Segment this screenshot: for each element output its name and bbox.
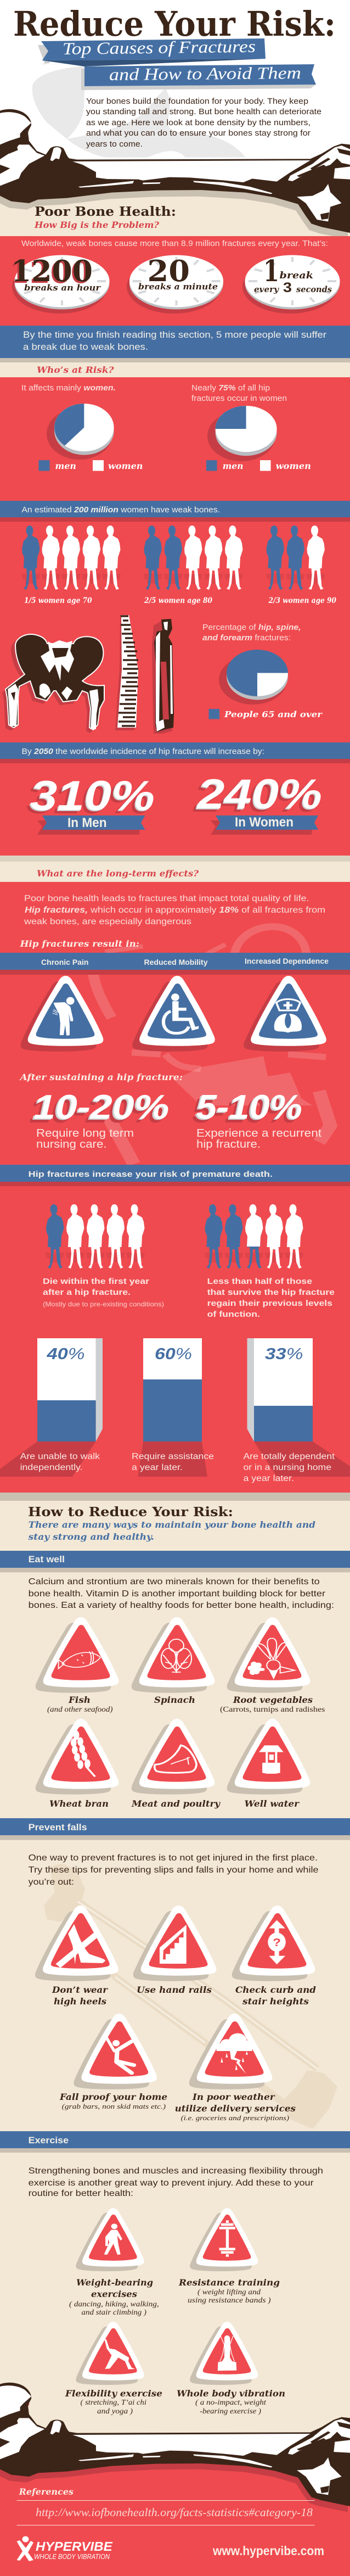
stat: 5-10 percent	[192, 1088, 321, 1150]
heading: how to reduce your risk: There are many ways to maintain your bone health and	[29, 1519, 315, 1530]
references: http://www.iofbonehealth.org/facts-statistics#category-18	[36, 2506, 313, 2519]
label: resistance training: ( weight lifting and	[197, 2288, 261, 2296]
label: weight-bearing	[69, 2277, 159, 2316]
people group: less than half regain function: regain their previous levels	[207, 1299, 332, 1308]
icon: hand rails	[133, 1906, 216, 1981]
text: 75 percent hip fractures	[191, 384, 287, 403]
stat: 240 percent in women	[193, 771, 322, 835]
label: fish: (and other seafood)	[47, 1705, 113, 1713]
panel: long-term effects red	[0, 882, 350, 1493]
label: fall proof	[59, 2092, 167, 2110]
legend: pie two: men	[223, 461, 244, 471]
bottom femur illustration	[0, 2383, 350, 2512]
text: poor bone health leads: Poor bone health leads to fractures that impact total quality of life.	[24, 894, 309, 903]
stat: 10-20 percent: nursing care.	[36, 1138, 106, 1150]
label: whole body vibration: -bearing exercise )	[200, 2407, 262, 2415]
legend: pie one: women	[108, 461, 143, 471]
stat: 10-20 percent: 10-20%	[29, 1092, 165, 1130]
text: percentage of fractures: Percentage of hip, spine,	[202, 623, 301, 632]
stat: 10-20 percent: 10-20%	[32, 1089, 168, 1127]
text: calcium and strontium	[29, 1577, 334, 1610]
blue band: eat well	[0, 1551, 350, 1572]
label: poor weather	[175, 2092, 296, 2122]
intro text	[86, 97, 321, 149]
heading: how to reduce your risk: How to Reduce Your Risk:	[28, 1505, 233, 1519]
bar: 40 percent unable to walk: 40%	[46, 1345, 84, 1363]
panel: how big red	[0, 236, 350, 326]
label: fall proof: Fall proof your home	[59, 2092, 167, 2102]
text: poor bone health leads: Hip fractures, which occur in approximately 18% of all fractures from	[25, 906, 325, 915]
label: root vegetables: (Carrots, turnips and radishes	[220, 1705, 325, 1713]
clock: 1 break every 3 seconds: every	[254, 284, 279, 294]
people group: die within first year: (Mostly due to pre-existing conditions)	[43, 1300, 164, 1308]
stat: 310 percent in men: 310%	[26, 776, 151, 823]
label: flexibility exercise: and yoga )	[97, 2407, 133, 2415]
blue band: result labels: Increased Dependence	[245, 957, 329, 965]
bar: 60 percent require assistance: 60%	[155, 1345, 192, 1363]
blue band: result labels	[0, 953, 350, 975]
blue band: result labels: Reduced Mobility	[144, 958, 208, 966]
pie chart: people 65 and over	[219, 650, 288, 705]
heading: how to reduce your risk	[28, 1505, 315, 1542]
heading: poor bone health: Poor Bone Health:	[35, 204, 176, 219]
people group: 2 of 5 age 80	[144, 526, 243, 605]
label: poor weather: (i.e. groceries and prescriptions)	[181, 2114, 289, 2122]
label: no high heels: high heels	[54, 1996, 106, 2007]
text: 75 percent hip fractures: Nearly 75% of all hip	[191, 384, 270, 393]
stat: 310 percent in men: 310%	[30, 773, 155, 819]
stat: 240 percent in women: 240%	[193, 774, 318, 821]
illustration: pelvis	[2, 634, 104, 733]
bar: 60 percent require assistance: a year later.	[132, 1463, 183, 1472]
stat: 5-10 percent: 5-10%	[195, 1089, 301, 1127]
label: curb heights	[235, 1985, 316, 2007]
clock: 20 breaks a minute: breaks a minute	[138, 282, 218, 292]
label: root vegetables	[220, 1695, 325, 1713]
panel: who's at risk red	[0, 377, 350, 856]
logo: hypervibe	[16, 2536, 112, 2561]
panel: how big red: Worldwide, weak bones cause more than 8.9 million fractures every year. That’s:	[21, 239, 328, 248]
text: strengthening bones	[29, 2166, 323, 2198]
people group: less than half regain function: that survive the hip fracture	[207, 1288, 335, 1297]
blue band: by the time: By the time you finish reading this section, 5 more people will suffer	[23, 329, 326, 340]
label: whole body vibration: ( a no-impact, weight	[195, 2398, 267, 2406]
icon: meat and poultry	[132, 1719, 214, 1795]
bar: 33 percent totally dependent: or in a nursing home	[244, 1463, 331, 1472]
logo: hypervibe: HYPERVIBE	[36, 2539, 112, 2553]
watermark: hip joint on red	[93, 926, 330, 1164]
blue band: by the time: a break due to weak bones.	[23, 342, 148, 352]
label: well water: Well water	[245, 1798, 300, 1809]
illustration: forearm bones	[152, 619, 174, 734]
blue band: by the time	[0, 326, 350, 362]
stat: 310 percent in men: 310%	[29, 774, 154, 820]
label: whole body vibration: Whole body vibration	[177, 2388, 285, 2399]
label: curb heights: Check curb and	[235, 1985, 316, 1995]
blue band: premature death	[0, 1165, 350, 1186]
bar: 40 percent unable to walk: Are unable to walk	[20, 1452, 100, 1461]
watermark: pelvis in header	[32, 66, 246, 158]
people group: less than half regain function: of function.	[207, 1310, 260, 1319]
people group: die within first year	[43, 1204, 164, 1308]
intro text: you standing tall and strong. But bone health can deteriorate	[86, 108, 321, 116]
label: poor weather: utilize delivery services	[175, 2103, 296, 2114]
heading: how to reduce your risk: stay strong and healthy.	[29, 1532, 154, 1542]
blue band: prevent falls	[0, 1818, 350, 1840]
label: flexibility exercise	[65, 2388, 162, 2415]
people group: less than half regain function: Less than half of those	[207, 1277, 312, 1286]
bar: 40 percent unable to walk	[0, 1338, 103, 1477]
clock: 1200 breaks an hour: 1200	[9, 256, 91, 290]
text: one way to prevent: One way to prevent fractures is to not get injured in the first place.	[29, 1853, 318, 1863]
text: strengthening bones: exercise is another great way to prevent injury. Add these to your	[29, 2178, 314, 2188]
intro text: years to come.	[86, 140, 143, 149]
text: calcium and strontium: bones. Eat a variety of healthy foods for better bone health, including:	[29, 1601, 334, 1610]
clock: 1 break every 3 seconds: seconds	[296, 284, 332, 294]
label: resistance training: using resistance bands )	[188, 2296, 271, 2304]
people group: 1 of 5 age 70	[21, 526, 121, 605]
stat: 240 percent in women: In Women	[235, 815, 293, 830]
legend: pie two: women	[275, 461, 311, 471]
bar: 33 percent totally dependent: 33%	[265, 1345, 303, 1363]
text: percentage of fractures	[202, 623, 301, 642]
legend: people 65 and over: People 65 and over	[224, 709, 323, 719]
label: resistance training	[178, 2277, 280, 2304]
ribbon banner: subtitle: and How to Avoid Them	[109, 63, 301, 84]
bar: 60 percent require assistance: Require assistance	[132, 1452, 214, 1461]
footer red background	[0, 2460, 350, 2576]
text: one way to prevent: Try these tips for preventing slips and falls in your home and while	[29, 1865, 319, 1875]
intro text: as we age. Here we look at bone density by the numbers,	[86, 119, 311, 127]
clock: 1200 breaks an hour	[9, 254, 110, 314]
stat: 5-10 percent: 5-10%	[192, 1092, 298, 1130]
label: hand rails: Use hand rails	[137, 1985, 212, 1995]
subheading: after sustaining: After sustaining a hip fracture:	[19, 1072, 183, 1082]
illustration: spine	[115, 615, 138, 730]
blue band: prevent falls: Prevent falls	[29, 1822, 87, 1832]
icon: wheelchair	[132, 976, 215, 1052]
text: calcium and strontium: Calcium and strontium are two minerals known for their benefits to	[29, 1577, 320, 1586]
blue band: by 2050	[0, 742, 350, 763]
legend: pie one	[38, 460, 143, 471]
label: fish: Fish	[68, 1695, 91, 1705]
stat: 310 percent in men	[26, 773, 155, 835]
label: poor weather: In poor weather	[192, 2092, 275, 2102]
label: wheat bran: Wheat bran	[49, 1798, 109, 1809]
blue band: exercise	[0, 2131, 350, 2153]
icon: spinach	[132, 1617, 214, 1693]
blue band: eat well: Eat well	[29, 1554, 65, 1564]
watermark: forearm on tan	[44, 1863, 337, 2129]
text: calcium and strontium: bone health. Vitamin D is another important building block for better	[29, 1589, 326, 1599]
blue band: exercise: Exercise	[29, 2135, 69, 2145]
label: whole body vibration	[177, 2388, 285, 2415]
icon: well water	[227, 1719, 310, 1795]
text: percentage of fractures: and forearm fractures:	[202, 634, 291, 642]
clock: 1 break every 3 seconds: 1	[263, 254, 279, 288]
icon: curb heights	[232, 1906, 315, 1981]
blue band: 200 million: An estimated 200 million women have weak bones.	[22, 505, 220, 515]
people group: 1 of 5 age 70: 1/5 women age 70	[24, 596, 92, 605]
text: poor bone health leads: weak bones, are especially dangerous	[24, 917, 191, 926]
clock: 1 break every 3 seconds: 3	[283, 280, 292, 295]
heading: long-term effects: What are the long-term effects?	[37, 868, 199, 879]
stat: 5-10 percent: hip fracture.	[196, 1138, 261, 1150]
label: weight-bearing: Weight-bearing	[76, 2277, 153, 2288]
label: weight-bearing: and stair climbing )	[81, 2308, 147, 2316]
stat: 10-20 percent	[29, 1088, 169, 1150]
people group: die within first year: Die within the first year	[43, 1277, 149, 1286]
people group: less than half regain function	[204, 1204, 335, 1319]
label: spinach: Spinach	[154, 1695, 195, 1705]
text: affects women: It affects mainly women.	[21, 384, 116, 393]
intro text: and what you can do to ensure your bones stay strong for	[86, 129, 311, 138]
icon: root vegetables	[227, 1617, 310, 1693]
bar: 33 percent totally dependent: Are totally dependent	[244, 1452, 335, 1461]
intro text: Your bones build the foundation for your body. They keep	[86, 97, 308, 106]
clock: 1200 breaks an hour: breaks an hour	[24, 283, 101, 293]
legend: pie two	[206, 460, 311, 471]
label: weight-bearing: ( dancing, hiking, walking,	[69, 2300, 159, 2308]
text: strengthening bones: Strengthening bones and muscles and increasing flexibility through	[29, 2166, 323, 2176]
blue band: result labels: Chronic Pain	[41, 958, 89, 966]
ribbon banner: subtitle	[38, 37, 316, 90]
stat: 5-10 percent: Experience a recurrent	[196, 1127, 321, 1139]
people group: die within first year: after a hip fracture.	[43, 1288, 131, 1297]
stat: 310 percent in men: In Men	[67, 815, 106, 830]
blue band: 200 million	[0, 501, 350, 522]
pie chart: hip fractures in women	[207, 406, 277, 461]
stat: 240 percent in women: 240%	[195, 772, 321, 819]
tan panel: poor bone health background	[0, 187, 350, 236]
blue band: by 2050: By 2050 the worldwide incidence of hip fracture will increase by:	[22, 747, 264, 756]
stat: 10-20 percent: 10-20%	[33, 1088, 169, 1126]
bar: 60 percent require assistance	[132, 1338, 214, 1477]
heading: who's at risk	[0, 362, 350, 377]
bar: 40 percent unable to walk: independently.	[20, 1463, 82, 1472]
icon: vibration machine	[190, 2322, 258, 2385]
stat: 240 percent in women: 240%	[196, 771, 322, 818]
subheading: hip fractures result in: Hip fractures result in:	[20, 938, 139, 949]
text: 75 percent hip fractures: fractures occur in women	[191, 394, 287, 403]
icon: barbell	[190, 2208, 258, 2271]
label: meat and poultry: Meat and poultry	[131, 1798, 221, 1809]
blue band: premature death: Hip fractures increase your risk of premature death.	[29, 1170, 273, 1179]
people group: 2 of 3 age 90	[266, 526, 337, 605]
clock: 1 break every 3 seconds	[242, 254, 340, 314]
clock: 1 break every 3 seconds: break	[280, 270, 313, 281]
website url: www.hypervibe.com	[212, 2544, 324, 2558]
icon: fish	[36, 1617, 118, 1693]
label: flexibility exercise: Flexibility exercise	[65, 2388, 162, 2399]
references: References	[19, 2486, 74, 2497]
clock: 20 breaks a minute	[127, 254, 223, 314]
clock: 1200 breaks an hour: 1200	[11, 254, 93, 288]
logo: hypervibe: WHOLE BODY VIBRATION	[34, 2553, 110, 2561]
text: one way to prevent	[29, 1853, 319, 1887]
references	[16, 2486, 315, 2525]
icon: yoga stretch	[76, 2322, 144, 2385]
bar: 33 percent totally dependent	[244, 1338, 350, 1483]
icon: curb heights: ?	[273, 1936, 281, 1948]
label: no high heels: Don’t wear	[52, 1985, 109, 1995]
text: one way to prevent: you’re out:	[29, 1877, 74, 1887]
people group: 2 of 5 age 80: 2/5 women age 80	[144, 596, 213, 605]
tan panel: how to reduce background	[0, 1493, 350, 2468]
legend: pie one: men	[55, 461, 76, 471]
icon: wheat bran	[36, 1719, 118, 1795]
label: fish	[47, 1695, 113, 1713]
stat: 10-20 percent: Require long term	[36, 1127, 134, 1139]
heading: poor bone health	[34, 204, 176, 230]
icon: walking	[76, 2208, 144, 2271]
label: no high heels	[52, 1985, 109, 2007]
text: poor bone health leads	[24, 894, 325, 926]
text: strengthening bones: routine for better health:	[29, 2189, 133, 2198]
label: resistance training: Resistance training	[178, 2277, 280, 2288]
label: root vegetables: Root vegetables	[233, 1695, 313, 1705]
heading: long-term effects	[0, 856, 350, 882]
top femur illustration	[0, 109, 350, 239]
people group: 2 of 3 age 90: 2/3 women age 90	[268, 596, 337, 605]
icon: fall proof	[74, 2014, 157, 2089]
icon: no high heels	[35, 1906, 118, 1981]
icon: chronic pain	[21, 976, 103, 1052]
icon: nurse	[244, 976, 326, 1052]
icon: poor weather	[189, 2014, 272, 2089]
ribbon banner: subtitle: Top Causes of Fractures	[63, 37, 256, 58]
label: weight-bearing: exercises	[91, 2289, 137, 2299]
heading: poor bone health: How Big is the Problem?	[34, 220, 160, 230]
clock: 20 breaks a minute: 20	[147, 254, 190, 288]
label: curb heights: stair heights	[242, 1996, 309, 2007]
stat: 5-10 percent: 5-10%	[196, 1088, 302, 1126]
label: fall proof: (grab bars, non skid mats etc.)	[62, 2102, 166, 2110]
heading: who's at risk: Who’s at Risk?	[37, 365, 115, 375]
bar: 33 percent totally dependent: a year later.	[244, 1474, 294, 1483]
pie chart: men vs women	[47, 404, 114, 460]
label: flexibility exercise: ( stretching, T’ai chi	[80, 2398, 146, 2406]
